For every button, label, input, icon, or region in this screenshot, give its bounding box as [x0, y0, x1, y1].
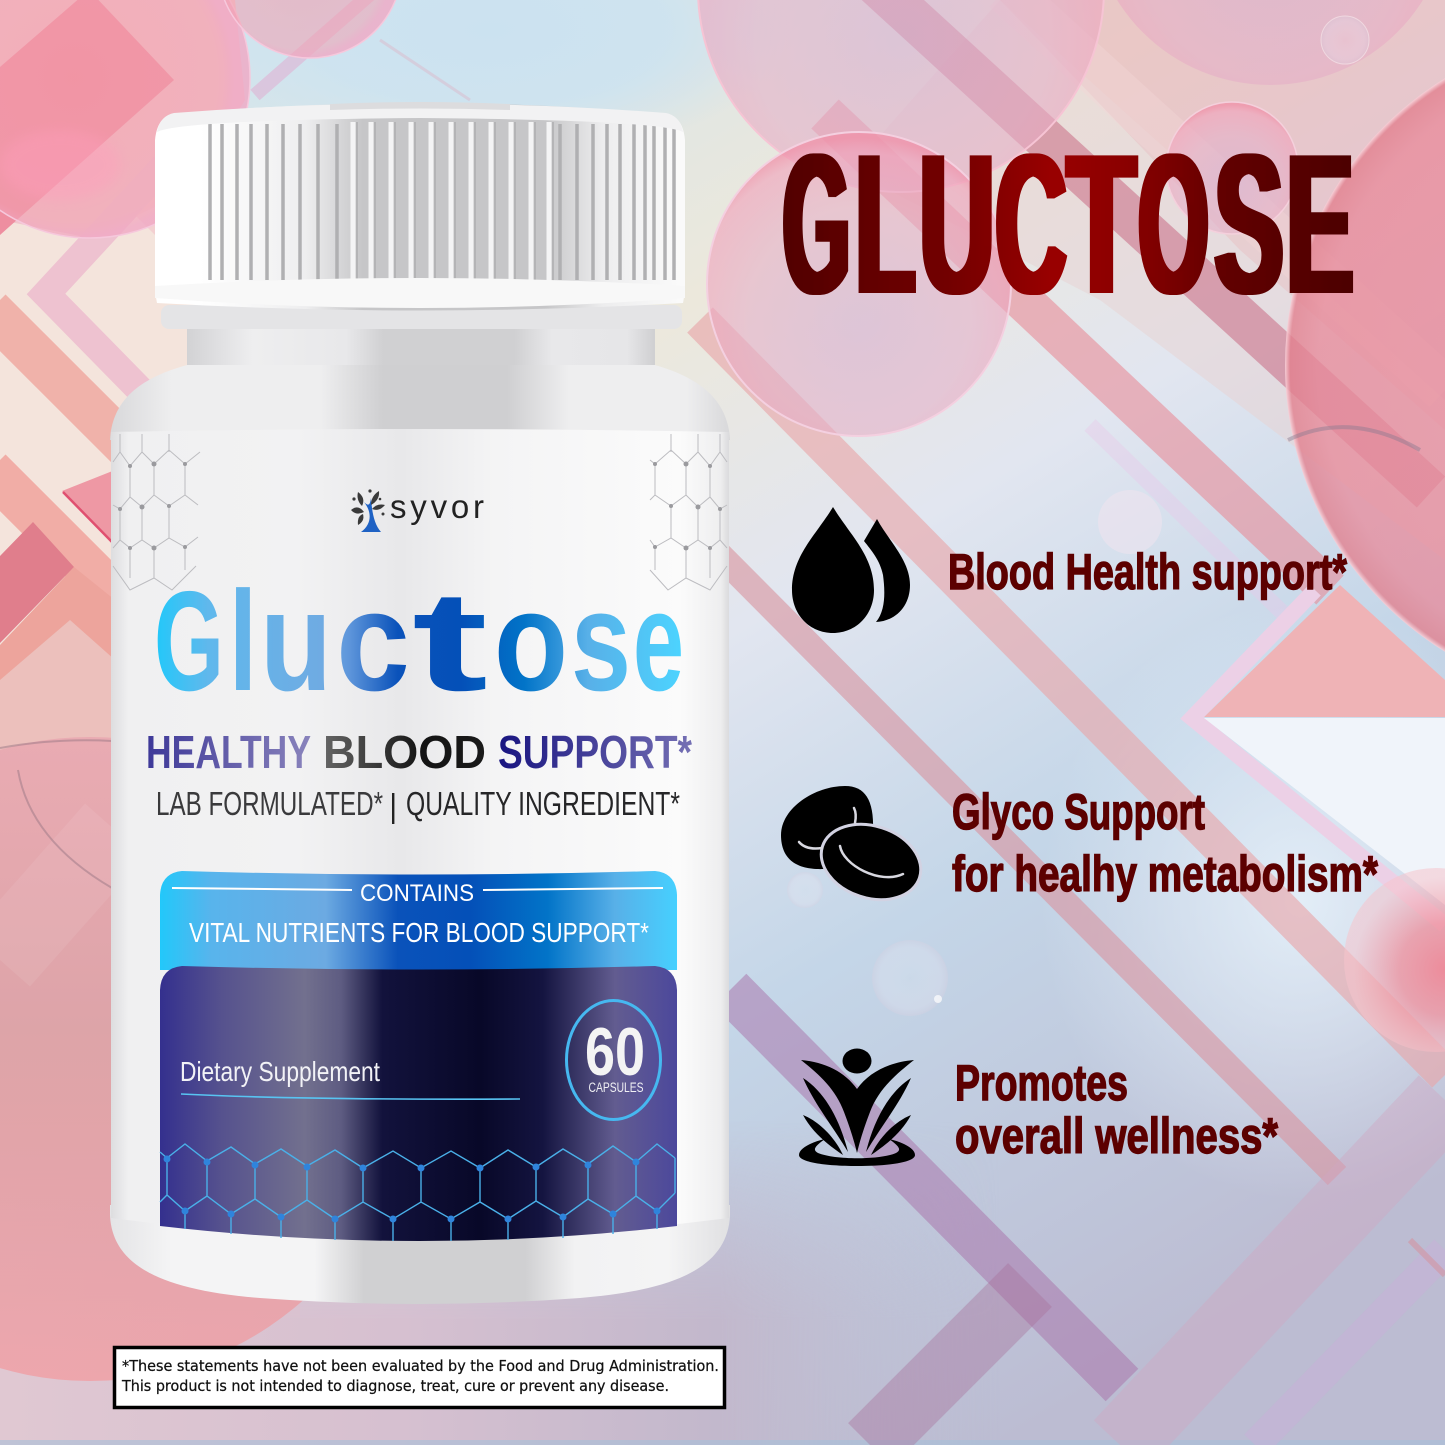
- chevron frame and triangle: [1204, 585, 1445, 717]
- benefit text: Glyco Support: [952, 784, 1205, 840]
- heading: O: [1138, 113, 1208, 336]
- disclaimer box: [114, 1348, 724, 1408]
- tagline: QUALITY INGREDIENT*: [406, 785, 680, 822]
- benefit: blood health: [792, 507, 1347, 633]
- icon: wellness figure: [799, 1048, 915, 1166]
- product name: G: [154, 562, 224, 721]
- icon: red blood cells: [781, 786, 931, 912]
- neck ring: [161, 305, 682, 329]
- dark panel: [160, 966, 677, 1241]
- product name: l: [229, 562, 257, 721]
- bottle label: [111, 429, 729, 1241]
- top sky lines: [255, 0, 375, 95]
- icon: tree: [351, 489, 385, 532]
- subtitle: HEALTHY: [146, 726, 311, 778]
- cap: [155, 102, 685, 310]
- contains heading: CONTAINS: [360, 880, 474, 907]
- contains band: [160, 871, 677, 970]
- hexagon pattern blue: [160, 1144, 675, 1241]
- product name: o: [494, 562, 568, 721]
- capsule count badge: 60: [585, 1014, 645, 1090]
- product name: s: [571, 562, 631, 721]
- product name: c: [336, 562, 410, 721]
- heading: S: [1214, 113, 1284, 336]
- heading: [783, 113, 1354, 336]
- brand logo: [351, 488, 484, 532]
- top left pale pink: [0, 0, 245, 238]
- dietary supplement text: Dietary Supplement: [180, 1056, 380, 1087]
- contains text: VITAL NUTRIENTS FOR BLOOD SUPPORT*: [189, 917, 649, 948]
- tagline: LAB FORMULATED*: [156, 785, 383, 822]
- heading: L: [856, 113, 916, 336]
- capsule count badge: [566, 1000, 660, 1120]
- bottle: [110, 102, 730, 1304]
- benefit text: overall wellness*: [955, 1108, 1278, 1164]
- top right wash: [1000, 0, 1445, 430]
- subtitle: [146, 726, 692, 778]
- benefit text: [955, 1055, 1278, 1164]
- benefit: glyco support: [781, 784, 1378, 912]
- capsule count badge: CAPSULES: [588, 1080, 644, 1095]
- heading: U: [920, 113, 994, 336]
- heading: C: [996, 113, 1066, 336]
- hexagon pattern right: [650, 434, 727, 590]
- benefit text: [952, 784, 1378, 902]
- icon: blood drops: [792, 507, 910, 633]
- bottom right bands: [730, 990, 1122, 1385]
- bottom wash: [0, 1190, 842, 1445]
- hexagon pattern left: [113, 434, 200, 590]
- heading: E: [1286, 113, 1354, 336]
- heading: T: [1067, 113, 1136, 336]
- disclaimer box: *These statements have not been evaluated by the Food and Drug Administration.: [122, 1357, 719, 1375]
- product name: u: [260, 562, 332, 721]
- subtitle: SUPPORT*: [498, 726, 692, 778]
- left cream panel: [0, 200, 300, 710]
- brand name: syvor: [390, 488, 484, 525]
- benefit text: Promotes: [955, 1055, 1128, 1111]
- product name: e: [633, 562, 684, 721]
- product name: t: [412, 562, 488, 721]
- heading: G: [783, 113, 850, 336]
- diagonal bands top: [871, 0, 1431, 492]
- bottom of bottle: [110, 1205, 730, 1304]
- bottle neck: [187, 322, 655, 372]
- disclaimer box: This product is not intended to diagnose, treat, cure or prevent any disease.: [121, 1377, 669, 1395]
- chevron: [46, 165, 165, 395]
- subtitle: BLOOD: [323, 726, 486, 778]
- benefit: wellness: [799, 1048, 1278, 1166]
- tagline: [156, 785, 680, 824]
- salmon diagonal bands: [0, 310, 130, 450]
- bottle shoulder: [110, 365, 730, 440]
